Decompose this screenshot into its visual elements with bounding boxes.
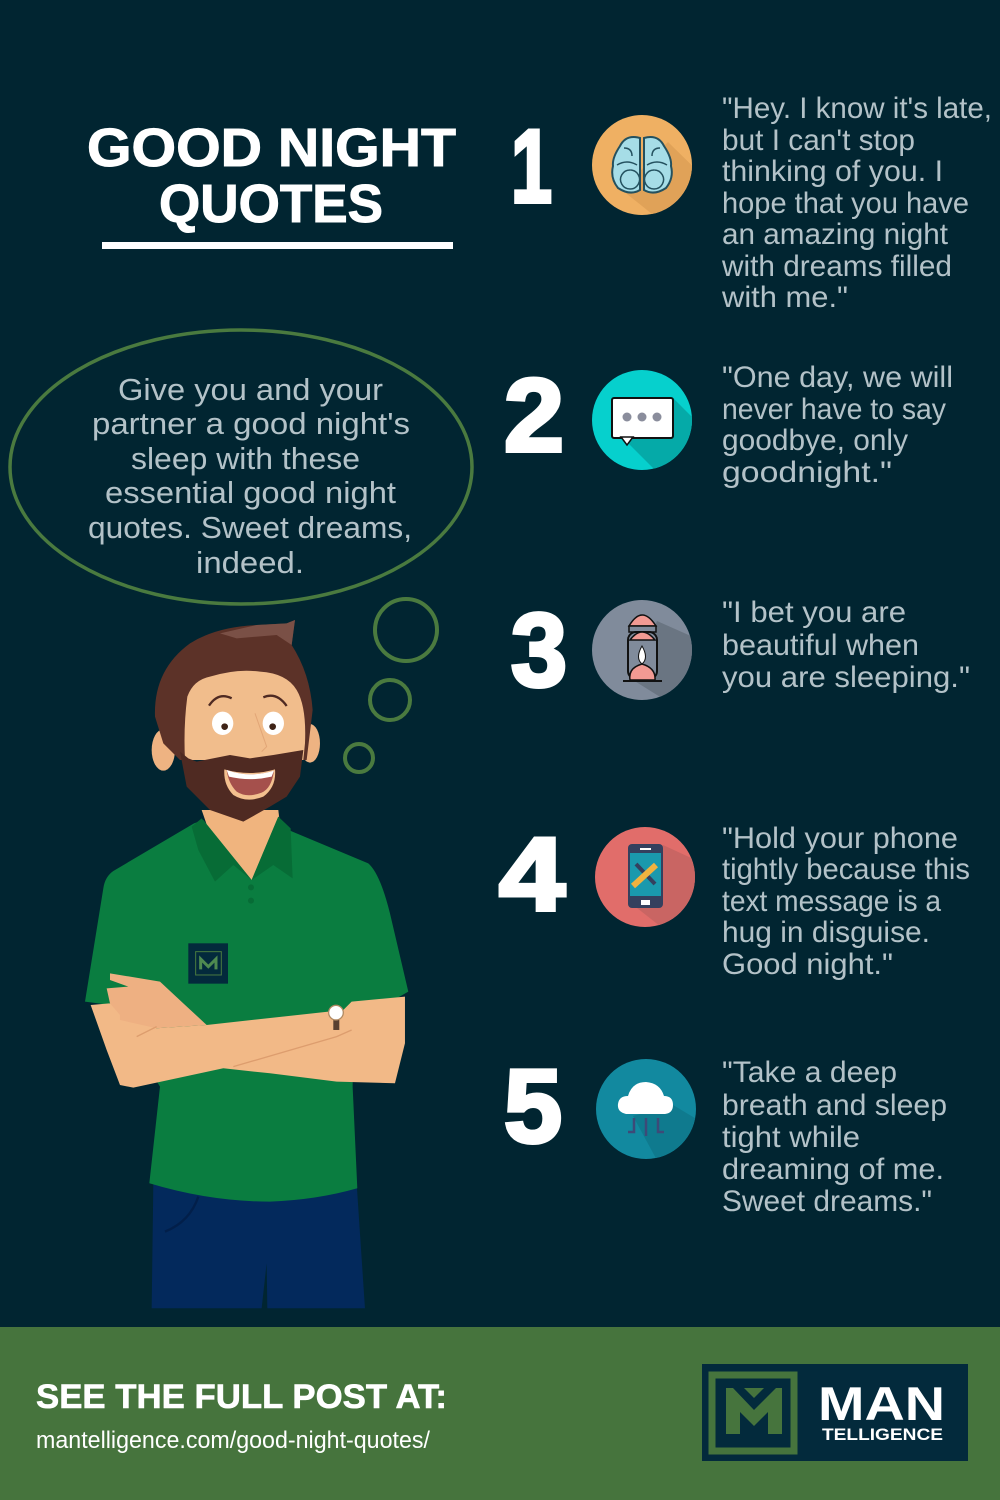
quote 2: goodnight." bbox=[722, 456, 892, 489]
quote 5: "Take a deep bbox=[722, 1056, 897, 1089]
logo: TELLIGENCE bbox=[822, 1425, 943, 1444]
number 3: 3 bbox=[511, 593, 567, 709]
quote 2: goodbye, only bbox=[722, 424, 908, 457]
quote 1: but I can't stop bbox=[722, 124, 915, 157]
quote 4: text message is a bbox=[722, 885, 941, 918]
number 4: 4 bbox=[499, 817, 565, 933]
item 3 bbox=[511, 600, 969, 700]
quote 2: never have to say bbox=[722, 393, 946, 426]
title: QUOTES bbox=[159, 174, 383, 234]
item 1 bbox=[511, 92, 992, 314]
title bbox=[87, 118, 456, 249]
quote 2 bbox=[722, 361, 953, 489]
icon: phone bbox=[595, 827, 700, 930]
quote 4: Good night." bbox=[722, 948, 893, 981]
quote 1: hope that you have bbox=[722, 187, 969, 220]
item 2 bbox=[504, 358, 953, 490]
thought bubble bbox=[10, 330, 472, 604]
icon: cloud bbox=[596, 1059, 696, 1159]
number 5: 5 bbox=[504, 1049, 562, 1165]
logo bbox=[702, 1364, 968, 1461]
thought circles bbox=[345, 599, 437, 772]
item 5 bbox=[504, 1059, 946, 1212]
thought bubble: indeed. bbox=[196, 545, 304, 580]
quote 3: "I bet you are bbox=[722, 596, 906, 629]
number 1: 1 bbox=[511, 109, 552, 225]
icon: chat bubble bbox=[592, 370, 692, 470]
quote 1: with me." bbox=[721, 281, 848, 314]
character: man with crossed arms bbox=[85, 620, 408, 1308]
quote 3: you are sleeping." bbox=[722, 661, 970, 694]
thought bubble: quotes. Sweet dreams, bbox=[88, 510, 412, 545]
quote 4: hug in disguise. bbox=[722, 916, 930, 949]
number 2: 2 bbox=[504, 358, 564, 474]
thought bubble: essential good night bbox=[105, 475, 396, 510]
footer call to action: SEE THE FULL POST AT: bbox=[36, 1378, 447, 1416]
quote 1: thinking of you. I bbox=[722, 155, 943, 188]
character head bbox=[152, 620, 320, 822]
item 4 bbox=[499, 817, 970, 981]
wristwatch bbox=[329, 1005, 343, 1030]
quote 1: "Hey. I know it's late, bbox=[722, 92, 992, 125]
quote 4: tightly because this bbox=[722, 853, 970, 886]
shirt badge bbox=[188, 943, 228, 984]
icon: lantern bbox=[592, 600, 700, 700]
quote 2: "One day, we will bbox=[722, 361, 953, 394]
title: GOOD NIGHT bbox=[87, 118, 456, 178]
thought bubble: Give you and your bbox=[118, 372, 383, 407]
quote 5 bbox=[722, 1056, 947, 1218]
quote 4 bbox=[722, 822, 970, 981]
icon: brain bbox=[592, 115, 692, 215]
thought bubble: partner a good night's bbox=[92, 406, 410, 441]
thought bubble: sleep with these bbox=[131, 441, 360, 476]
logo: MAN bbox=[818, 1377, 945, 1430]
quote 3 bbox=[722, 596, 970, 694]
quote 5: tight while bbox=[722, 1121, 860, 1154]
character body bbox=[85, 810, 408, 1308]
quote 5: breath and sleep bbox=[722, 1089, 947, 1122]
quote 5: Sweet dreams." bbox=[722, 1185, 932, 1218]
quote 1: with dreams filled bbox=[721, 250, 952, 283]
quote 5: dreaming of me. bbox=[722, 1153, 944, 1186]
quote 3: beautiful when bbox=[722, 629, 919, 662]
quote 1 bbox=[721, 92, 992, 314]
footer url: mantelligence.com/good-night-quotes/ bbox=[36, 1427, 430, 1454]
quote 1: an amazing night bbox=[722, 218, 949, 251]
quote 4: "Hold your phone bbox=[722, 822, 958, 855]
footer band bbox=[0, 1327, 1000, 1500]
